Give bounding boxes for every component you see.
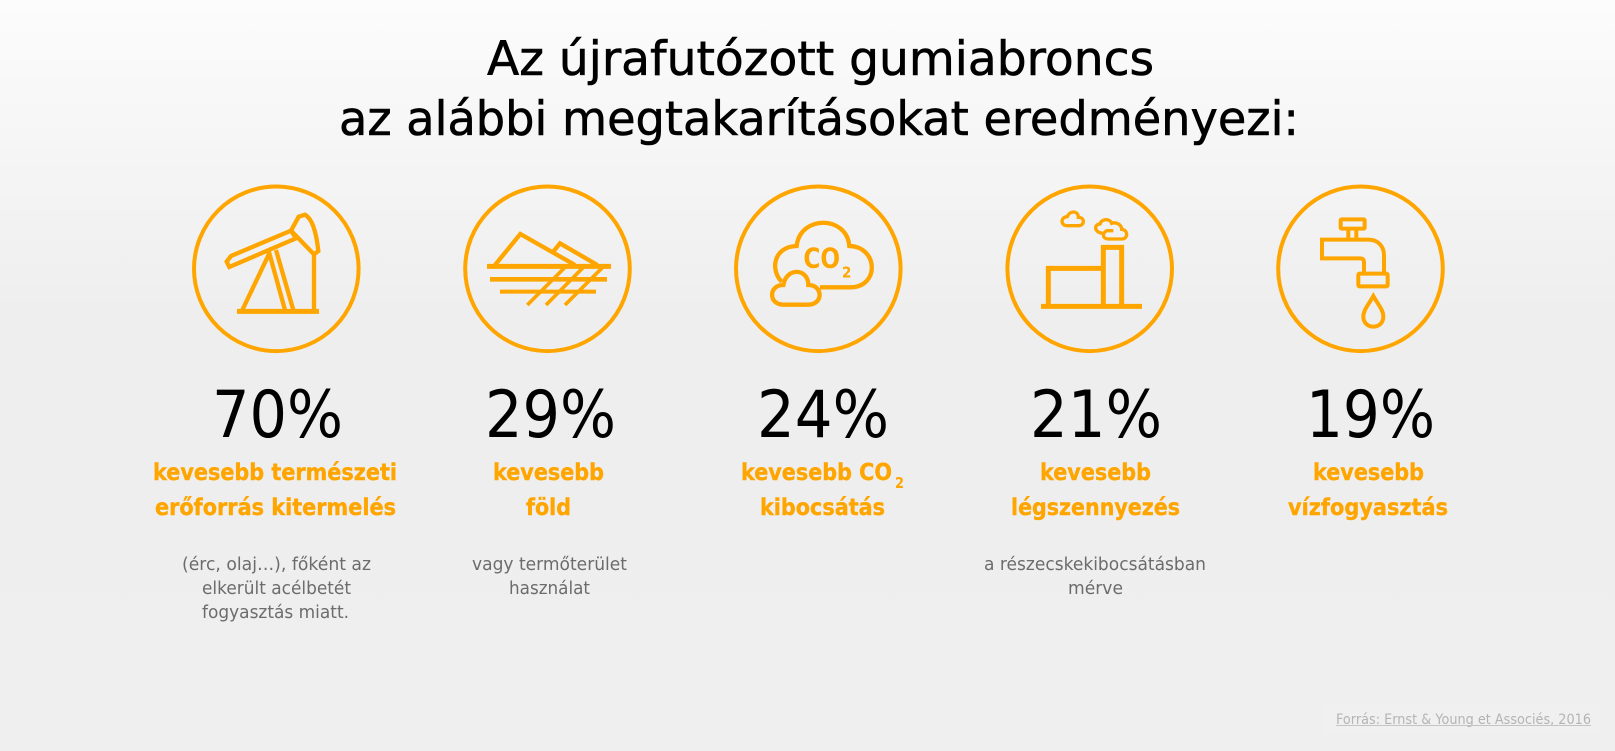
icon: oil pump [194, 186, 359, 351]
heading: water: vízfogyasztás [1288, 495, 1448, 521]
note: land: használat [509, 578, 590, 599]
note: air pollution: a részecskekibocsátásban [984, 554, 1206, 575]
heading: air pollution: kevesebb [1040, 460, 1151, 486]
heading: CO2: 2 [895, 474, 904, 492]
note: land [472, 554, 627, 599]
note: land: vagy termőterület [472, 554, 627, 575]
percentage: 24%: 24% [757, 378, 889, 453]
icon: tap [1278, 186, 1443, 351]
title: az alábbi megtakarításokat eredményezi: [339, 92, 1299, 147]
panel: water [1278, 186, 1448, 521]
icon: land [465, 186, 630, 351]
heading: water: kevesebb [1313, 460, 1424, 486]
note: natural resources [182, 554, 371, 623]
note: air pollution [984, 554, 1206, 599]
note: air pollution: mérve [1068, 578, 1123, 599]
title: Az újrafutózott gumiabroncs [487, 32, 1154, 87]
note: natural resources: (érc, olaj…), főként az [182, 554, 371, 575]
icon: CO2 cloud: CO [803, 243, 840, 274]
source note [1323, 705, 1601, 734]
source note: Forrás: Ernst & Young et Associés, 2016 [1336, 712, 1591, 728]
title [339, 32, 1299, 147]
icon: CO2 cloud: 2 [842, 263, 851, 281]
percentage: 21%: 21% [1030, 378, 1162, 453]
heading: CO2 [741, 460, 904, 521]
panel: natural resources [153, 186, 397, 623]
percentage: 70%: 70% [212, 378, 343, 453]
heading: natural resources: kevesebb természeti [153, 460, 397, 486]
heading: natural resources: erőforrás kitermelés [155, 495, 396, 521]
heading: CO2: kevesebb CO [741, 460, 892, 486]
panel: CO2 [736, 186, 904, 521]
heading: air pollution [1011, 460, 1180, 521]
note: natural resources: elkerült acélbetét [202, 578, 351, 599]
icon: factory [1007, 186, 1172, 351]
icon: CO2 cloud [736, 186, 901, 351]
heading: land: föld [526, 495, 571, 521]
heading: natural resources [153, 460, 397, 521]
heading: air pollution: légszennyezés [1011, 495, 1180, 521]
percentage: 29%: 29% [485, 378, 616, 453]
heading: land [493, 460, 604, 521]
panel: land [465, 186, 630, 599]
heading: CO2: kibocsátás [760, 495, 885, 521]
note: natural resources: fogyasztás miatt. [202, 602, 349, 623]
heading: water [1288, 460, 1448, 521]
percentage: 19%: 19% [1306, 378, 1435, 453]
panel: air pollution [984, 186, 1206, 599]
heading: land: kevesebb [493, 460, 604, 486]
